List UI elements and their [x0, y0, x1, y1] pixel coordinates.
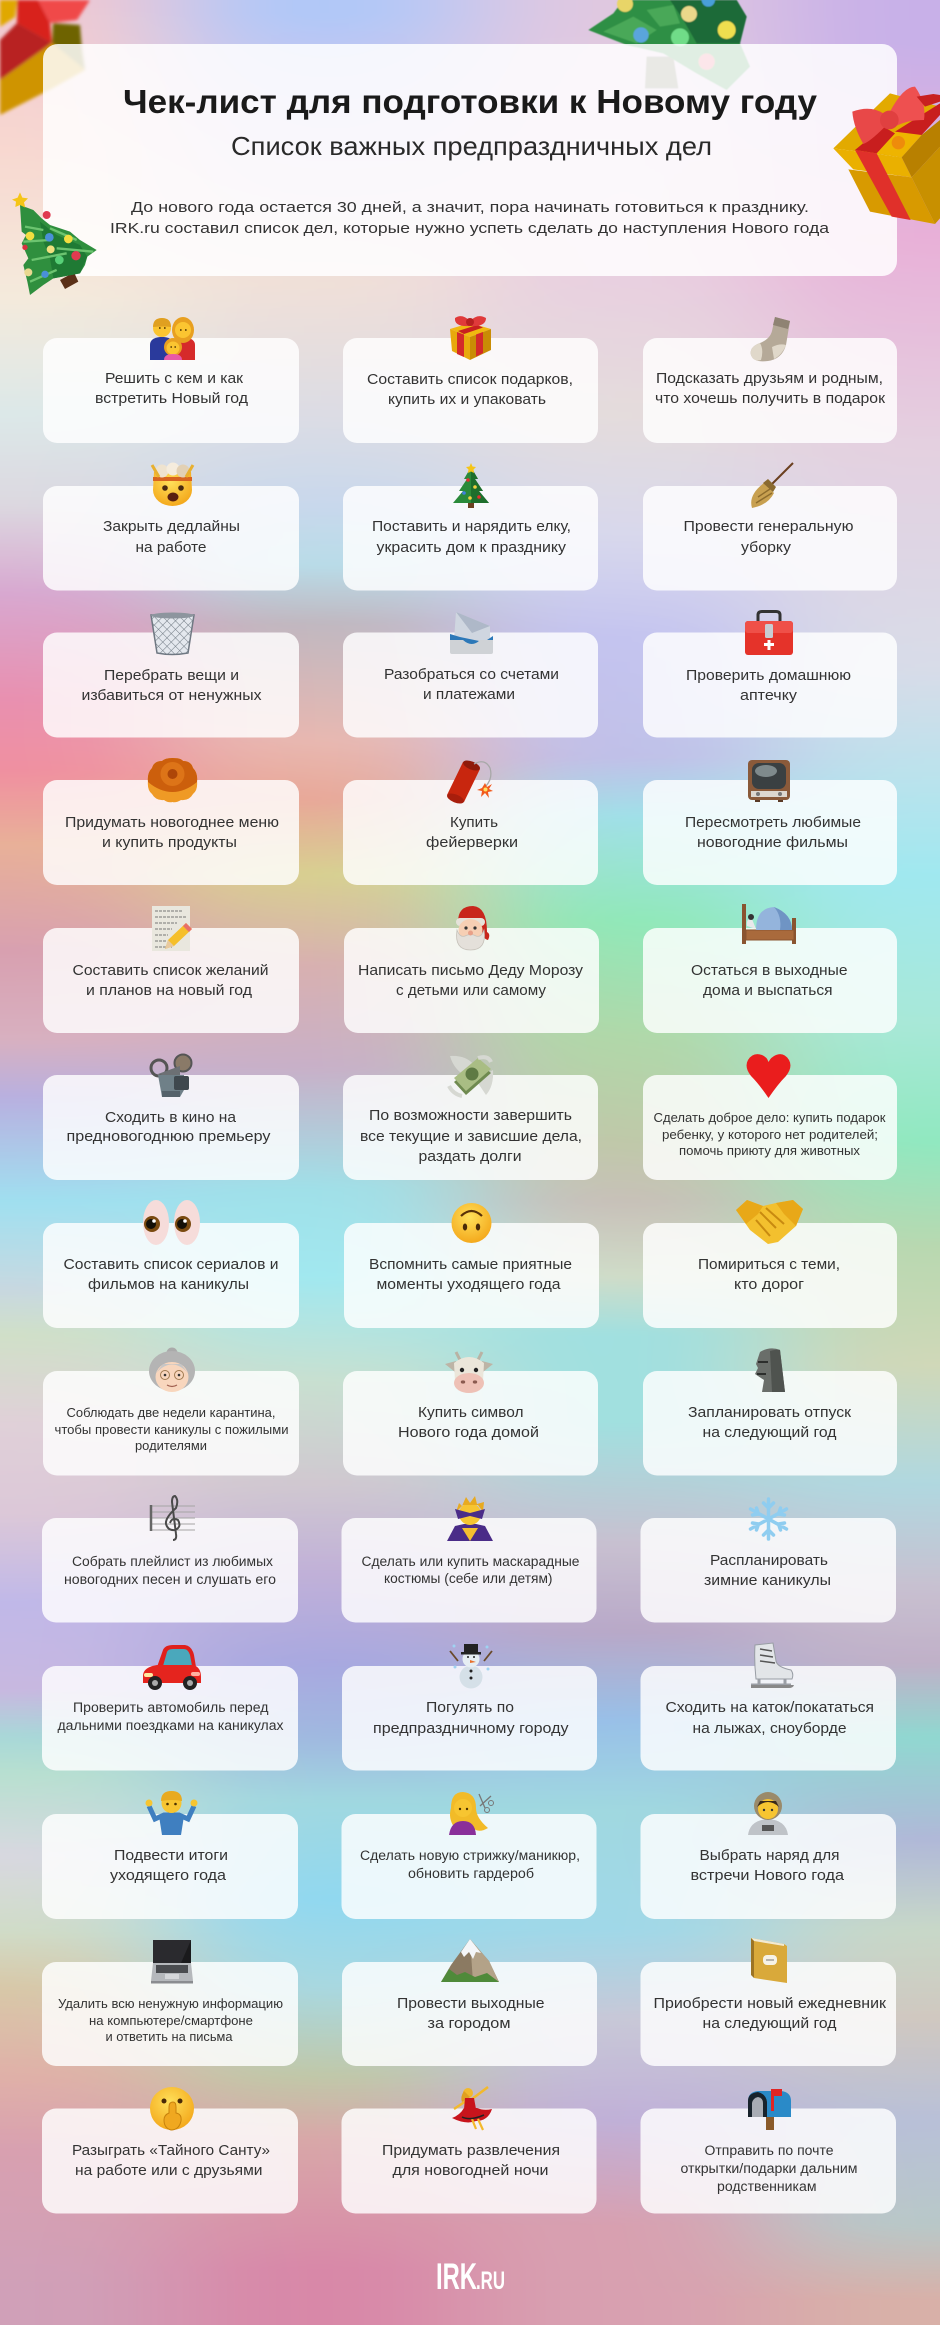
- label: и купить продукты: [102, 835, 237, 851]
- label: [384, 667, 559, 703]
- icon: dancer: [452, 2087, 492, 2130]
- label: [372, 519, 571, 556]
- card: costumes: [342, 1496, 596, 1622]
- icon: red car: [143, 1645, 201, 1690]
- label: Соблюдать две недели карантина,: [66, 1406, 276, 1420]
- card: menu: [43, 758, 299, 885]
- intro text: До нового года остается 30 дней, а значит, пора начинать готовиться к празднику.: [131, 199, 809, 216]
- icon: money with wings: [449, 1056, 493, 1096]
- label: Закрыть дедлайны: [103, 519, 240, 535]
- icon: woman getting haircut: [449, 1792, 494, 1835]
- label: моменты уходящего года: [376, 1277, 562, 1293]
- intro text: IRK.ru составил список дел, которые нужно успеть сделать до наступления Нового года: [110, 220, 830, 237]
- label: [95, 371, 249, 407]
- label: Подсказать друзьям и родным,: [656, 371, 883, 387]
- label: [654, 1996, 887, 2032]
- card: first aid: [643, 612, 897, 738]
- label: на компьютере/смартфоне: [89, 2014, 253, 2028]
- card: weekends out of town: [342, 1939, 597, 2066]
- icon: mailbox: [748, 2089, 791, 2130]
- label: [666, 1700, 874, 1737]
- label: костюмы (себе или детям): [384, 1571, 552, 1586]
- icon: ice skate: [751, 1643, 794, 1688]
- card: gifts: [343, 316, 598, 443]
- icon: tree, left: [12, 192, 97, 295]
- label: [64, 1554, 276, 1587]
- label: на следующий год: [702, 1425, 837, 1441]
- label: Купить: [450, 815, 498, 831]
- label: [691, 963, 848, 999]
- row 10: [42, 1643, 896, 1770]
- label: дома и выспаться: [703, 983, 832, 999]
- icon: big gift, right: [833, 87, 940, 224]
- card: cinema: [43, 1054, 299, 1180]
- card: outfit: [640, 1792, 896, 1919]
- icon: snow-capped mountain: [441, 1939, 499, 1982]
- label: кто дорог: [734, 1277, 804, 1293]
- label: Собрать плейлист из любимых: [72, 1554, 273, 1569]
- card: playlist: [42, 1496, 298, 1622]
- icon: wastebasket: [151, 612, 194, 654]
- card: memories: [344, 1203, 599, 1328]
- card: skating: [640, 1643, 896, 1770]
- label: [103, 519, 240, 556]
- card: good deed: [643, 1054, 897, 1180]
- label: [110, 1848, 228, 1884]
- logo: IRK.ru: IRK: [436, 2256, 477, 2297]
- card: cleaning: [643, 463, 897, 590]
- label: [369, 1257, 572, 1293]
- icon: bed: [742, 904, 794, 944]
- label: новогодние фильмы: [697, 835, 848, 851]
- card: bills: [343, 612, 598, 738]
- label: Запланировать отпуск: [688, 1405, 852, 1421]
- label: Провести выходные: [397, 1996, 544, 2012]
- card: entertainment: [342, 2087, 596, 2214]
- row 9: [42, 1496, 896, 1622]
- label: Нового года домой: [398, 1425, 539, 1441]
- row 1: [43, 316, 897, 443]
- label: Вспомнить самые приятные: [369, 1257, 572, 1273]
- label: украсить дом к празднику: [376, 540, 567, 556]
- label: Сходить на каток/покататься: [666, 1700, 874, 1716]
- label: новогодних песен и слушать его: [64, 1572, 276, 1587]
- title: Чек-лист для подготовки к Новому году: [123, 83, 818, 120]
- label: зимние каникулы: [704, 1573, 831, 1589]
- label: [360, 1108, 582, 1165]
- label: Сходить в кино на: [105, 1110, 237, 1126]
- label: [360, 1848, 580, 1881]
- label: [358, 963, 584, 999]
- icon: eyes: [143, 1200, 200, 1245]
- icon: musical score: [150, 1496, 195, 1540]
- label: Выбрать наряд для: [700, 1848, 840, 1864]
- card: hint about gifts: [643, 317, 897, 443]
- card: walk: [342, 1644, 597, 1770]
- label: [373, 1700, 569, 1737]
- label: раздать долги: [418, 1149, 522, 1165]
- icon: family: [150, 317, 195, 360]
- row 12: [42, 1938, 896, 2066]
- card: results: [42, 1791, 298, 1919]
- logo: IRK.ru: .RU: [476, 2267, 505, 2295]
- label: [66, 1110, 271, 1145]
- label: и ответить на письма: [106, 2030, 233, 2044]
- label: Придумать новогоднее меню: [65, 815, 279, 831]
- label: [686, 668, 851, 704]
- icon: gift: [450, 316, 491, 360]
- label: ребенку, у которого нет родителей;: [662, 1128, 878, 1142]
- label: Сделать доброе дело: купить подарок: [654, 1111, 886, 1125]
- icon: snowman: [450, 1644, 492, 1688]
- label: на работе: [136, 540, 206, 556]
- label: на лыжах, сноуборде: [692, 1721, 846, 1737]
- label: [680, 2143, 858, 2194]
- label: Проверить домашнюю: [686, 668, 851, 684]
- icon: astronaut: [748, 1792, 788, 1835]
- label: Отправить по почте: [704, 2143, 834, 2158]
- label: предновогоднюю премьеру: [66, 1129, 271, 1145]
- card: wish list: [43, 906, 299, 1033]
- card: debts: [343, 1056, 598, 1180]
- card: haircut: [342, 1792, 596, 1919]
- label: [72, 963, 268, 999]
- label: Сделать или купить маскарадные: [362, 1554, 580, 1569]
- card: cleanup info: [42, 1940, 298, 2066]
- icon: christmas tree: [453, 463, 489, 508]
- label: Решить с кем и как: [105, 371, 244, 387]
- label: Подвести итоги: [114, 1848, 228, 1864]
- label: встречи Нового года: [690, 1868, 845, 1884]
- label: Составить список подарков,: [367, 372, 573, 388]
- label: Разыграть «Тайного Санту»: [72, 2143, 270, 2159]
- row 6: [43, 1054, 897, 1180]
- card: who to celebrate with: [43, 317, 299, 443]
- label: [54, 1406, 289, 1453]
- icon: cow: [445, 1352, 493, 1393]
- icon: sock: [751, 317, 790, 361]
- label: [362, 1554, 580, 1586]
- icon: snowflake: [750, 1499, 786, 1539]
- icon: broom: [751, 463, 793, 508]
- label: что хочешь получить в подарок: [655, 391, 886, 407]
- card: secret santa: [42, 2087, 298, 2214]
- card: symbol of the year: [343, 1352, 598, 1476]
- label: Провести генеральную: [684, 519, 854, 535]
- label: с детьми или самому: [396, 983, 547, 999]
- label: Приобрести новый ежедневник: [654, 1996, 887, 2012]
- card: fireworks: [343, 758, 598, 885]
- label: Удалить всю ненужную информацию: [58, 1997, 283, 2011]
- icon: red heart: [747, 1054, 790, 1098]
- subtitle: Список важных предпраздничных дел: [231, 131, 712, 161]
- label: Написать письмо Деду Морозу: [358, 963, 584, 979]
- card: vacation: [643, 1348, 897, 1476]
- card: quarantine: [43, 1348, 299, 1476]
- label: Распланировать: [710, 1553, 828, 1569]
- label: открытки/подарки дальним: [680, 2161, 858, 2176]
- label: [367, 372, 573, 408]
- label: [72, 2143, 270, 2179]
- row 8: [43, 1348, 897, 1476]
- label: на следующий год: [702, 2016, 837, 2032]
- card: sleep: [643, 904, 897, 1033]
- blurred gift, top left corner: [0, 0, 90, 115]
- icon: firecracker: [446, 758, 493, 806]
- label: родственникам: [717, 2179, 816, 2194]
- label: фейерверки: [426, 835, 518, 851]
- label: дальними поездками на каникулах: [58, 1718, 284, 1733]
- label: Остаться в выходные: [691, 963, 848, 979]
- blurred christmas tree behind header: [588, 0, 750, 90]
- label: Пересмотреть любимые: [685, 815, 861, 831]
- row 7: [43, 1200, 897, 1328]
- label: По возможности завершить: [369, 1108, 572, 1124]
- label: уходящего года: [110, 1868, 227, 1884]
- label: [684, 519, 854, 556]
- icon: notebook: [751, 1938, 787, 1983]
- label: помочь приюту для животных: [679, 1144, 861, 1158]
- label: [426, 815, 518, 851]
- panel: header: [43, 44, 897, 276]
- label: [698, 1257, 840, 1293]
- label: уборку: [741, 540, 792, 556]
- label: Поставить и нарядить елку,: [372, 519, 571, 535]
- label: родителями: [135, 1439, 207, 1453]
- label: чтобы провести каникулы с пожилыми: [54, 1423, 289, 1437]
- label: Составить список сериалов и: [64, 1257, 278, 1273]
- label: Проверить автомобиль перед: [73, 1700, 269, 1715]
- row 3: [43, 612, 897, 738]
- label: все текущие и зависшие дела,: [360, 1129, 582, 1145]
- row 11: [42, 1791, 896, 1919]
- intro text: [110, 199, 830, 237]
- label: [398, 1405, 539, 1441]
- label: и планов на новый год: [86, 983, 253, 999]
- label: [688, 1405, 852, 1441]
- label: встретить Новый год: [95, 391, 249, 407]
- label: и платежами: [423, 687, 515, 703]
- icon: incoming envelope: [450, 612, 493, 654]
- icon: toolbox: [745, 612, 793, 655]
- icon: mooncake: [148, 758, 197, 802]
- icon: film projector: [151, 1054, 192, 1097]
- label: Разобраться со счетами: [384, 667, 559, 683]
- label: Купить символ: [418, 1405, 524, 1421]
- icon: supervillain: [447, 1496, 493, 1541]
- card: mail postcards: [640, 2089, 896, 2214]
- label: предпраздничному городу: [373, 1721, 569, 1737]
- label: [65, 815, 279, 851]
- label: Помириться с теми,: [698, 1257, 840, 1273]
- card: winter holidays: [640, 1499, 896, 1622]
- card: reconcile: [643, 1200, 897, 1328]
- icon: laptop: [151, 1940, 193, 1984]
- card: series list: [43, 1200, 299, 1328]
- card: movies: [643, 760, 897, 885]
- label: [82, 668, 262, 704]
- label: фильмов на каникулы: [88, 1277, 249, 1293]
- label: для новогодней ночи: [392, 2163, 548, 2179]
- icon: Santa: [456, 906, 489, 950]
- icon: upside-down face: [452, 1203, 492, 1243]
- label: аптечку: [740, 688, 798, 704]
- label: [685, 815, 861, 851]
- card: deadlines: [43, 462, 299, 590]
- label: Придумать развлечения: [382, 2143, 560, 2159]
- label: [690, 1848, 845, 1884]
- label: Перебрать вещи и: [104, 668, 239, 684]
- row 13: [42, 2087, 896, 2214]
- label: [58, 1700, 284, 1733]
- icon: shushing face: [150, 2087, 194, 2130]
- icon: handshake: [736, 1200, 803, 1244]
- label: на работе или с друзьями: [75, 2163, 262, 2179]
- label: Составить список желаний: [72, 963, 268, 979]
- icon: shrug: [146, 1791, 198, 1835]
- icon: grandmother: [149, 1348, 195, 1392]
- label: Погулять по: [426, 1700, 514, 1716]
- label: Сделать новую стрижку/маникюр,: [360, 1848, 580, 1863]
- label: [655, 371, 886, 407]
- card: tree: [343, 463, 598, 590]
- icon: television: [748, 760, 790, 802]
- icon: exploding head: [152, 462, 193, 506]
- label: [397, 1996, 544, 2032]
- icon: moai: [755, 1348, 785, 1392]
- icon: memo: [152, 906, 192, 951]
- label: [654, 1111, 886, 1158]
- card: car: [42, 1645, 298, 1770]
- label: купить их и упаковать: [388, 392, 546, 408]
- label: [704, 1553, 831, 1589]
- row 5: [43, 904, 897, 1033]
- card: letter to Santa: [344, 906, 599, 1033]
- card: declutter: [43, 612, 299, 738]
- label: за городом: [428, 2016, 510, 2032]
- card: planner: [640, 1938, 896, 2066]
- row 2: [43, 462, 897, 590]
- label: [58, 1997, 283, 2044]
- row 4: [43, 758, 897, 885]
- label: [382, 2143, 560, 2179]
- label: избавиться от ненужных: [82, 688, 262, 704]
- label: [64, 1257, 278, 1293]
- label: обновить гардероб: [408, 1866, 534, 1881]
